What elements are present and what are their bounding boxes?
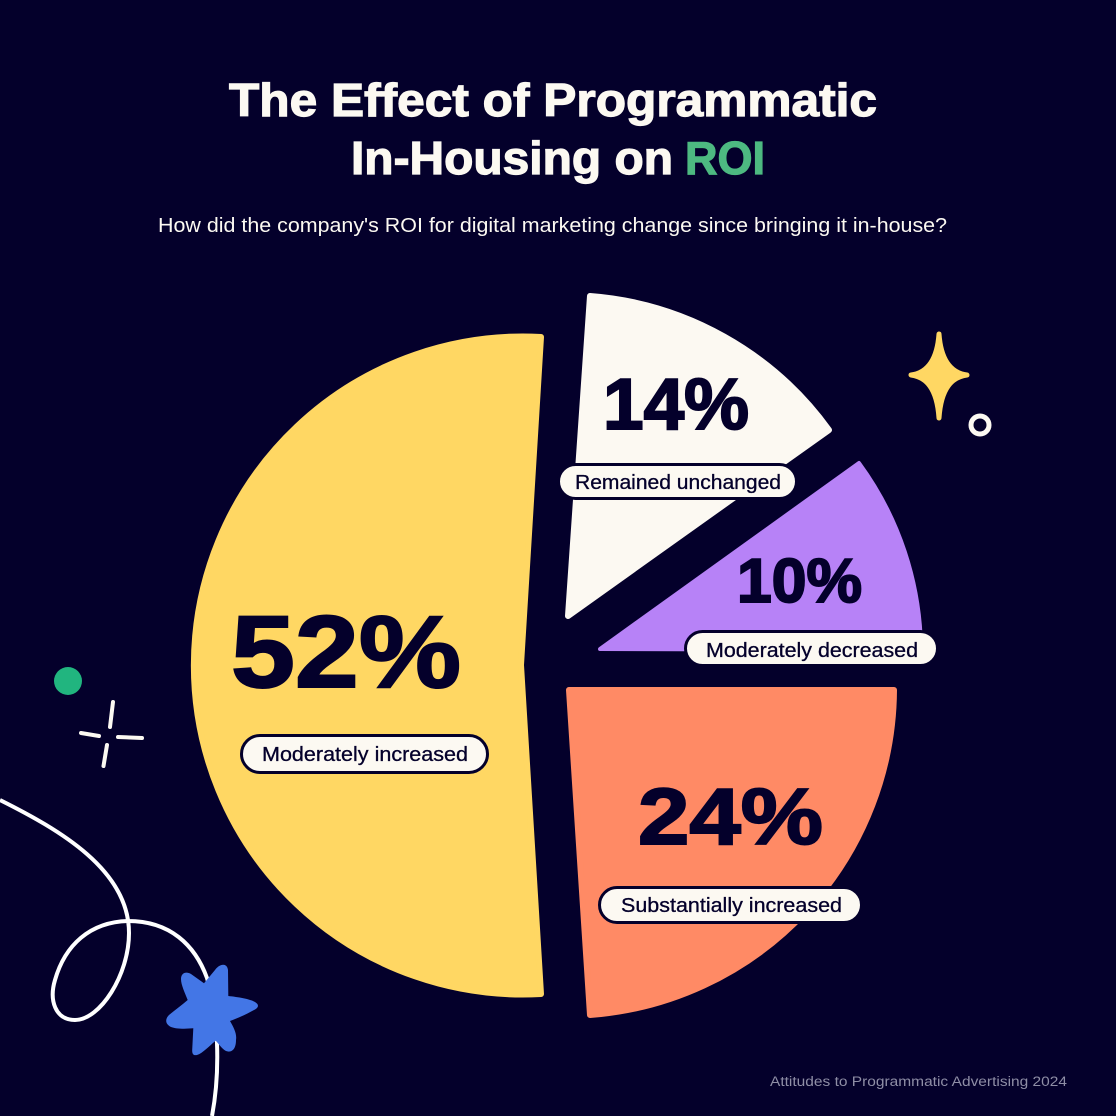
slice: remained unchanged 14%: 14% <box>603 365 749 445</box>
icon: blue star <box>166 965 258 1055</box>
slice: moderately decreased 10%: 10% <box>737 547 862 616</box>
title <box>229 74 877 184</box>
slice: remained unchanged 14% <box>558 296 829 616</box>
slice: moderately decreased 10% <box>600 463 938 666</box>
slice: moderately increased 52%: 52% <box>231 595 461 709</box>
slice: moderately increased 52% <box>194 337 541 995</box>
icon: small ring <box>971 416 989 434</box>
pie chart <box>194 296 938 1015</box>
icon: white sparkle lines <box>81 702 142 766</box>
slice: remained unchanged 14%: Remained unchanged <box>575 472 781 494</box>
icon: green dot <box>54 667 82 695</box>
source note: Attitudes to Programmatic Advertising 2024 <box>770 1074 1068 1089</box>
decorative looping line <box>0 800 217 1116</box>
slice: moderately increased 52%: Moderately increased <box>262 744 468 766</box>
slice: substantially increased 24%: 24% <box>638 772 823 861</box>
subtitle: How did the company's ROI for digital marketing change since bringing it in-house? <box>158 215 947 237</box>
slice: substantially increased 24% <box>569 690 894 1015</box>
slice: moderately decreased 10%: Moderately decreased <box>706 640 918 662</box>
title: The Effect of Programmatic <box>229 74 877 126</box>
title: ROI <box>685 132 765 184</box>
title: In-Housing on <box>351 132 673 184</box>
slice: substantially increased 24%: Substantially increased <box>621 895 842 917</box>
icon: yellow sparkle <box>911 334 967 418</box>
